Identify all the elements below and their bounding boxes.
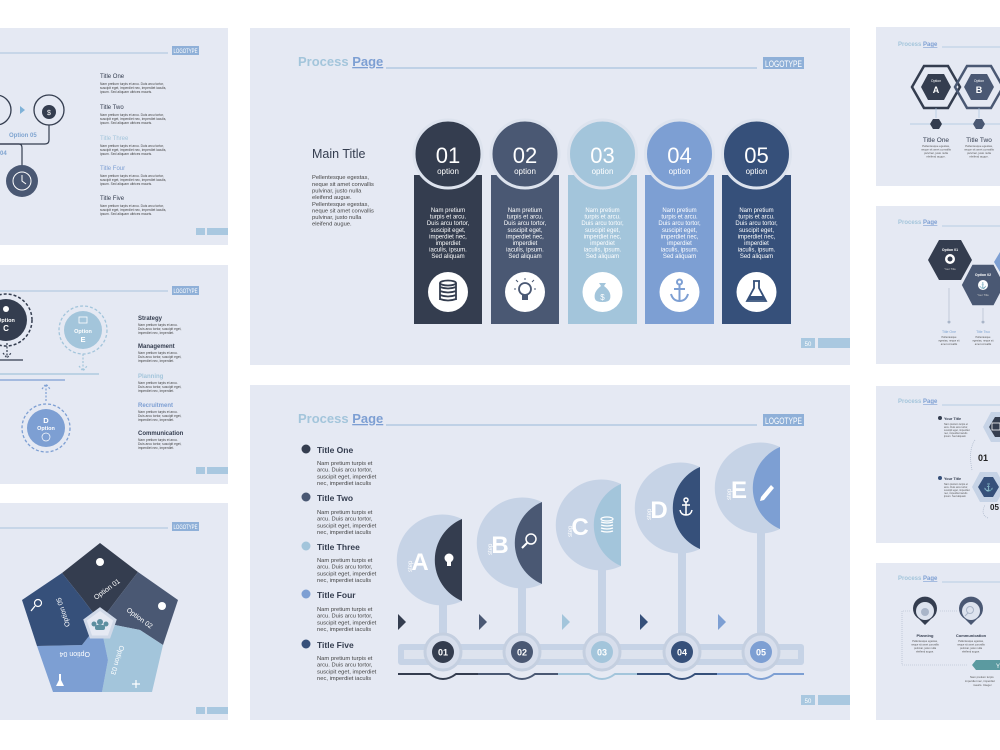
hex option 01 — [928, 240, 972, 280]
main title and paragraph: Pellentesque egestas, — [312, 175, 369, 181]
step D: step — [647, 508, 653, 520]
hex option 01: Your Title — [944, 267, 956, 271]
column 01: Nam pretium — [431, 208, 465, 214]
panel: right slide 3 (cycle 01-05) — [876, 386, 1000, 543]
panel: right slide 1 (hexagon options): pulvinar, justo nulla — [924, 151, 948, 155]
step A: 01 — [438, 648, 448, 658]
column 03 — [568, 120, 637, 324]
icon: flask — [736, 272, 776, 312]
column 03: option — [592, 167, 613, 176]
text list: Nam pretium turpis et arcu. Duis arcu tortor, — [100, 144, 164, 148]
main title and paragraph: pulvinar, justo nulla — [312, 188, 362, 194]
hex 05: ⚓ — [984, 482, 994, 492]
title list: arcu. Duis arcu tortor, — [317, 517, 373, 523]
step C: 03 — [597, 648, 607, 658]
panel: right slide 3 (cycle 01-05): ipsum. Sed aliquam — [944, 435, 966, 438]
column 02: iaculis, ipsum. — [506, 248, 544, 254]
step D: D — [650, 497, 668, 524]
column 03: suscipit eget, — [585, 228, 620, 234]
panel: right slide 3 (cycle 01-05): arcu. Duis arcu tortor, — [944, 486, 968, 489]
text list: ipsum. Sed aliquam ultrices mauris. — [100, 90, 152, 94]
hex option 01: Option 01 — [942, 248, 958, 252]
panel: right slide 3 (cycle 01-05): Your Title — [944, 477, 961, 481]
panel: left slide 2 (options C D E): imperdiet nec, imperdiet. — [138, 446, 174, 450]
column 01: suscipit eget, — [430, 228, 466, 234]
text list: Nam pretium turpis et arcu. Duis arcu tortor, — [100, 174, 164, 178]
panel: right slide 2 (filled hexagons): amet convallis — [941, 342, 958, 346]
title list: suscipit eget, imperdiet — [317, 523, 377, 529]
step B: step — [488, 543, 494, 555]
hex A — [912, 66, 960, 108]
arrows — [398, 614, 726, 630]
main title and paragraph — [312, 147, 374, 228]
panel: center top slide (five option columns) — [250, 28, 850, 365]
title list: arcu. Duis arcu tortor, — [317, 565, 373, 571]
icon: money bag: $ — [600, 293, 605, 302]
step D: 04 — [677, 648, 687, 658]
panel: left slide 2 (options C D E): Nam pretium turpis et arcu. — [138, 438, 178, 442]
hex option 02: ⚓ — [979, 282, 987, 290]
step C — [556, 480, 621, 670]
text list: Communication — [138, 431, 184, 437]
panel: right slide 4 (pins planning/communication): Nam pretium turpis — [970, 675, 994, 679]
teal bar: Y — [996, 664, 1000, 670]
title list: arcu. Duis arcu tortor, — [317, 614, 373, 620]
panel: left slide 2 (options C D E): Nam pretium turpis et arcu. — [138, 323, 178, 327]
hex B: Option — [974, 79, 984, 83]
column 02: suscipit eget, — [507, 228, 543, 234]
panel: right slide 2 (filled hexagons): egestas, neque sit — [938, 338, 960, 342]
column 03: Sed aliquam — [586, 254, 619, 260]
panel: right slide 4 (pins planning/communication): mauris. Integer — [973, 683, 992, 687]
heading: Process Page — [298, 54, 383, 69]
column 02: turpis et arcu. — [507, 215, 544, 221]
pin: communication: Pellentesque egestas, — [958, 639, 984, 643]
text list: ipsum. Sed aliquam ultrices mauris. — [100, 182, 152, 186]
pentagon chart: Option 04 — [60, 650, 90, 657]
panel: left slide 2 (options C D E) — [0, 265, 228, 484]
panel: left slide 2 (options C D E): Duis arcu tortor, suscipit eget, — [138, 414, 182, 418]
diagram: option circles: 04 — [0, 151, 7, 157]
panel: right slide 4 (pins planning/communication) — [876, 563, 1000, 720]
option C circle — [0, 294, 32, 360]
title list: Nam pretium turpis et — [317, 558, 373, 564]
panel: right slide 4 (pins planning/communication): imperdiet nec, imperdiet — [965, 679, 995, 683]
column 02: Sed aliquam — [508, 254, 542, 260]
panel: right slide 1 (hexagon options): neque sit amet convallis — [964, 148, 995, 152]
title list: Nam pretium turpis et — [317, 510, 373, 516]
column 05: turpis et arcu. — [738, 215, 775, 221]
pin: planning: Planning — [917, 633, 934, 638]
diagram: option circles: Option 05 — [9, 133, 37, 139]
pin: planning: eleifend augue. — [916, 650, 934, 654]
logotype — [763, 57, 804, 69]
panel: right slide 3 (cycle 01-05): nec, imperdiet iaculis — [944, 432, 968, 435]
panel: left slide 2 (options C D E): imperdiet nec, imperdiet. — [138, 418, 174, 422]
pin: planning: Pellentesque egestas, — [912, 639, 938, 643]
option E circle: E — [80, 335, 86, 344]
panel: left slide 2 (options C D E): imperdiet nec, imperdiet. — [138, 359, 174, 363]
panel: right slide 1 (hexagon options) — [876, 27, 1000, 186]
panel: left slide 2 (options C D E): LOGOTYPE — [174, 289, 198, 295]
panel: left slide 2 (options C D E): Duis arcu tortor, suscipit eget, — [138, 355, 182, 359]
column 02: imperdiet — [513, 241, 538, 247]
column 03: 03 — [590, 143, 615, 168]
title list: Nam pretium turpis et — [317, 656, 373, 662]
step B: 02 — [517, 648, 527, 658]
hex A: A — [933, 85, 940, 95]
heading: Process Page — [298, 411, 383, 426]
option D circle — [22, 384, 70, 452]
column 01: imperdiet nec, — [429, 234, 467, 240]
hex B: B — [976, 85, 983, 95]
column 03: Duis arcu tortor, — [581, 221, 624, 227]
title list: Nam pretium turpis et — [317, 461, 373, 467]
hex B — [955, 66, 1000, 108]
panel: right slide 2 (filled hexagons): Pellentesque — [942, 335, 957, 339]
column 02: Nam pretium — [508, 208, 542, 214]
panel: left slide 2 (options C D E): Nam pretium turpis et arcu. — [138, 410, 178, 414]
pentagon chart: Option 02 — [125, 607, 154, 631]
panel: right slide 1 (hexagon options): Title One — [923, 137, 949, 144]
text list: suscipit eget, imperdiet nec, imperdiet iaculis, — [100, 117, 166, 121]
panel: center bottom slide (steps A-E) — [250, 385, 850, 720]
column 03: imperdiet — [590, 241, 615, 247]
column 01: Sed aliquam — [431, 254, 465, 260]
text list: Title Two — [100, 105, 124, 111]
panel: right slide 2 (filled hexagons): egestas, neque sit — [972, 338, 994, 342]
column 01: turpis et arcu. — [430, 215, 467, 221]
pentagon chart — [22, 543, 178, 692]
column 04: option — [669, 167, 690, 176]
text list — [100, 74, 166, 216]
panel: right slide 1 (hexagon options): eleifend augue. — [926, 154, 946, 158]
text list: Title Three — [100, 136, 129, 142]
text list: Nam pretium turpis et arcu. Duis arcu tortor, — [100, 204, 164, 208]
panel: left slide 2 (options C D E): Nam pretium turpis et arcu. — [138, 381, 178, 385]
panel: right slide 3 (cycle 01-05): Nam pretium turpis et — [944, 483, 968, 486]
title list: Title Four — [317, 590, 356, 600]
panel: right slide 3 (cycle 01-05): Your Title — [944, 417, 961, 421]
title list: Nam pretium turpis et — [317, 607, 373, 613]
panel: right slide 1 (hexagon options): neque sit amet convallis — [921, 148, 952, 152]
step E: 05 — [756, 648, 766, 658]
text list: Management — [138, 344, 175, 350]
title list: Title Two — [317, 493, 353, 503]
pin: communication — [956, 597, 987, 654]
text list: ipsum. Sed aliquam ultrices mauris. — [100, 212, 152, 216]
option D circle: Option — [37, 426, 55, 432]
pin: communication: eleifend augue. — [962, 650, 980, 654]
main title and paragraph: Main Title — [312, 147, 366, 161]
option E circle — [0, 306, 107, 380]
column 04: suscipit eget, — [662, 228, 697, 234]
title list: suscipit eget, imperdiet — [317, 620, 377, 626]
panel: left slide 2 (options C D E): Duis arcu tortor, suscipit eget, — [138, 327, 182, 331]
step D — [635, 462, 700, 670]
panel: right slide 2 (filled hexagons): Title One — [942, 330, 956, 334]
title list: nec, imperdiet iaculis — [317, 578, 371, 584]
panel: right slide 1 (hexagon options): Pellentesque egestas, — [922, 144, 950, 148]
column 01: imperdiet — [436, 241, 461, 247]
title list: Title One — [317, 445, 353, 455]
track bar — [398, 644, 804, 679]
text list: Title One — [100, 74, 125, 80]
panel: right slide 3 (cycle 01-05): 05 — [990, 503, 999, 512]
panel: right slide 2 (filled hexagons): Pellentesque — [976, 335, 991, 339]
title list: nec, imperdiet iaculis — [317, 530, 371, 536]
title list: nec, imperdiet iaculis — [317, 627, 371, 633]
panel: right slide 3 (cycle 01-05): Process Page — [898, 399, 938, 405]
diagram: option circles: $ — [47, 110, 51, 117]
column 04: turpis et arcu. — [661, 215, 698, 221]
text list — [138, 316, 184, 437]
pin: communication: pulvinar, justo nulla — [960, 646, 983, 650]
title list: arcu. Duis arcu tortor, — [317, 663, 373, 669]
column 01: 01 — [436, 143, 460, 168]
panel: right slide 1 (hexagon options): eleifend augue. — [969, 154, 989, 158]
hex 05 — [972, 472, 1000, 502]
column 05: Duis arcu tortor, — [735, 221, 778, 227]
pin: communication: Communication — [956, 633, 987, 638]
column 04: Nam pretium — [662, 208, 697, 214]
panel: left slide 2 (options C D E): Duis arcu tortor, suscipit eget, — [138, 385, 182, 389]
logotype box: LOGOTYPE — [174, 49, 198, 55]
step C: C — [571, 514, 589, 541]
step A: A — [411, 549, 429, 576]
option D circle: D — [43, 416, 49, 425]
column 02: 02 — [513, 143, 537, 168]
panel: right slide 4 (pins planning/communication): Process Page — [898, 576, 938, 582]
column 02 — [491, 120, 559, 324]
text list: suscipit eget, imperdiet nec, imperdiet iaculis, — [100, 148, 166, 152]
page number — [801, 338, 850, 348]
icon: money bag — [582, 272, 622, 312]
hex option 02 — [961, 264, 1000, 306]
column 05: suscipit eget, — [739, 228, 774, 234]
step A — [397, 514, 462, 670]
column 04: iaculis, ipsum. — [661, 248, 699, 254]
title list: arcu. Duis arcu tortor, — [317, 468, 373, 474]
panel: left slide 2 (options C D E): Duis arcu tortor, suscipit eget, — [138, 442, 182, 446]
text list: Nam pretium turpis et arcu. Duis arcu tortor, — [100, 82, 164, 86]
hex option 02: Option 02 — [975, 273, 991, 277]
panel: right slide 3 (cycle 01-05): nec, imperdiet iaculis — [944, 492, 968, 495]
title list: Title Three — [317, 542, 360, 552]
column 05: 05 — [744, 143, 769, 168]
main title and paragraph: eleifend augue. — [312, 195, 352, 201]
main title and paragraph: neque sit amet convallis — [312, 182, 374, 188]
step E: E — [731, 477, 747, 504]
column 01: iaculis, ipsum. — [429, 248, 467, 254]
step B: B — [491, 532, 509, 559]
step B — [477, 498, 542, 670]
title list: nec, imperdiet iaculis — [317, 676, 371, 682]
column 04: imperdiet nec, — [661, 234, 699, 240]
title list: suscipit eget, imperdiet — [317, 571, 377, 577]
column 05 — [722, 120, 791, 324]
column 05: option — [746, 167, 767, 176]
hex 01 — [983, 412, 1000, 442]
icon: anchor — [660, 272, 700, 312]
column 03: iaculis, ipsum. — [584, 248, 622, 254]
panel: right slide 1 (hexagon options): pulvinar, justo nulla — [967, 151, 991, 155]
pin: planning — [911, 597, 940, 654]
text list: suscipit eget, imperdiet nec, imperdiet iaculis, — [100, 178, 166, 182]
panel: left slide 1 (timeline options) — [0, 28, 228, 245]
column 03: Nam pretium — [585, 208, 620, 214]
column 01: Duis arcu tortor, — [427, 221, 470, 227]
column 02: Duis arcu tortor, — [504, 221, 547, 227]
panel: left slide 2 (options C D E): Nam pretium turpis et arcu. — [138, 351, 178, 355]
column 03: imperdiet nec, — [584, 234, 622, 240]
text list: Strategy — [138, 316, 163, 322]
pin: communication: neque sit amet convallis — [957, 642, 986, 646]
panel: right slide 2 (filled hexagons): amet convallis — [975, 342, 992, 346]
main title and paragraph: Pellentesque egestas, — [312, 202, 369, 208]
panel: center bottom slide (steps A-E): LOGOTYPE — [765, 416, 802, 426]
column 05: Nam pretium — [739, 208, 774, 214]
panel: right slide 3 (cycle 01-05): 01 — [978, 453, 988, 463]
panel: right slide 1 (hexagon options): Pellentesque egestas, — [965, 144, 993, 148]
icon: coins — [428, 272, 468, 312]
panel: right slide 2 (filled hexagons) — [876, 206, 1000, 364]
diagram: option circles — [0, 95, 64, 197]
panel: right slide 2 (filled hexagons): Process Page — [898, 220, 938, 226]
logotype box — [172, 46, 199, 55]
panel: right slide 1 (hexagon options): Title Two — [966, 137, 992, 144]
step C: step — [568, 525, 574, 537]
panel: right slide 3 (cycle 01-05): Nam pretium turpis et — [944, 423, 968, 426]
page number: 50 — [805, 699, 812, 705]
column 02: option — [514, 167, 536, 176]
pentagon chart: Option 03 — [109, 644, 125, 676]
pentagon chart: Option 01 — [93, 578, 122, 602]
text list: ipsum. Sed aliquam ultrices mauris. — [100, 152, 152, 156]
panel: left slide 3 (pentagon): LOGOTYPE — [174, 525, 198, 531]
text list: suscipit eget, imperdiet nec, imperdiet iaculis, — [100, 86, 166, 90]
logotype: LOGOTYPE — [765, 59, 802, 69]
main title and paragraph: eleifend augue. — [312, 222, 352, 228]
hex A: Option — [931, 79, 941, 83]
column 04: imperdiet — [667, 241, 692, 247]
column 04: Sed aliquam — [663, 254, 696, 260]
text list: suscipit eget, imperdiet nec, imperdiet iaculis, — [100, 208, 166, 212]
text list: ipsum. Sed aliquam ultrices mauris. — [100, 121, 152, 125]
column 05: iaculis, ipsum. — [738, 248, 776, 254]
text list: Recruitment — [138, 403, 173, 409]
teal bar — [972, 660, 1000, 670]
option E circle: Option — [74, 329, 92, 335]
option C circle: C — [3, 324, 9, 333]
panel: right slide 3 (cycle 01-05): arcu. Duis arcu tortor, — [944, 426, 968, 429]
column 05: imperdiet — [744, 241, 769, 247]
text list: Title Four — [100, 166, 125, 172]
title list: suscipit eget, imperdiet — [317, 474, 377, 480]
column 05: imperdiet nec, — [738, 234, 776, 240]
panel: left slide 3 (pentagon) — [0, 503, 228, 720]
title list: Title Five — [317, 640, 354, 650]
title list: suscipit eget, imperdiet — [317, 669, 377, 675]
page number — [801, 695, 850, 705]
text list: Nam pretium turpis et arcu. Duis arcu tortor, — [100, 113, 164, 117]
text list: Title Five — [100, 196, 125, 202]
step A: step — [408, 560, 414, 572]
title list: nec, imperdiet iaculis — [317, 481, 371, 487]
column 04: Duis arcu tortor, — [658, 221, 701, 227]
panel: left slide 2 (options C D E): imperdiet nec, imperdiet. — [138, 389, 174, 393]
icon: light bulb — [505, 272, 545, 312]
panel: right slide 3 (cycle 01-05): ipsum. Sed aliquam — [944, 495, 966, 498]
panel: right slide 1 (hexagon options): Process Page — [898, 42, 938, 48]
main title and paragraph: neque sit amet convallis — [312, 208, 374, 214]
title list — [302, 444, 377, 682]
step E: step — [727, 488, 733, 500]
hex option 02: Your Title — [977, 293, 989, 297]
page number: 50 — [805, 342, 812, 348]
pin: planning: neque sit amet convallis — [911, 642, 940, 646]
panel: right slide 3 (cycle 01-05): suscipit eget, imperdiet — [944, 429, 970, 432]
pin: planning: pulvinar, justo nulla — [914, 646, 937, 650]
panel: right slide 2 (filled hexagons): Title Two — [976, 330, 990, 334]
step E — [715, 442, 780, 670]
text list: Planning — [138, 374, 164, 380]
column 03: turpis et arcu. — [584, 215, 621, 221]
panel: right slide 3 (cycle 01-05): suscipit eget, imperdiet — [944, 489, 970, 492]
column 05: Sed aliquam — [740, 254, 773, 260]
column 01: option — [437, 167, 459, 176]
pentagon chart: Option 05 — [56, 596, 72, 628]
column 02: imperdiet nec, — [506, 234, 544, 240]
column 04 — [645, 120, 714, 324]
column 01 — [414, 120, 482, 324]
column 04: 04 — [667, 143, 692, 168]
panel: left slide 2 (options C D E): imperdiet nec, imperdiet. — [138, 331, 174, 335]
main title and paragraph: pulvinar, justo nulla — [312, 215, 362, 221]
